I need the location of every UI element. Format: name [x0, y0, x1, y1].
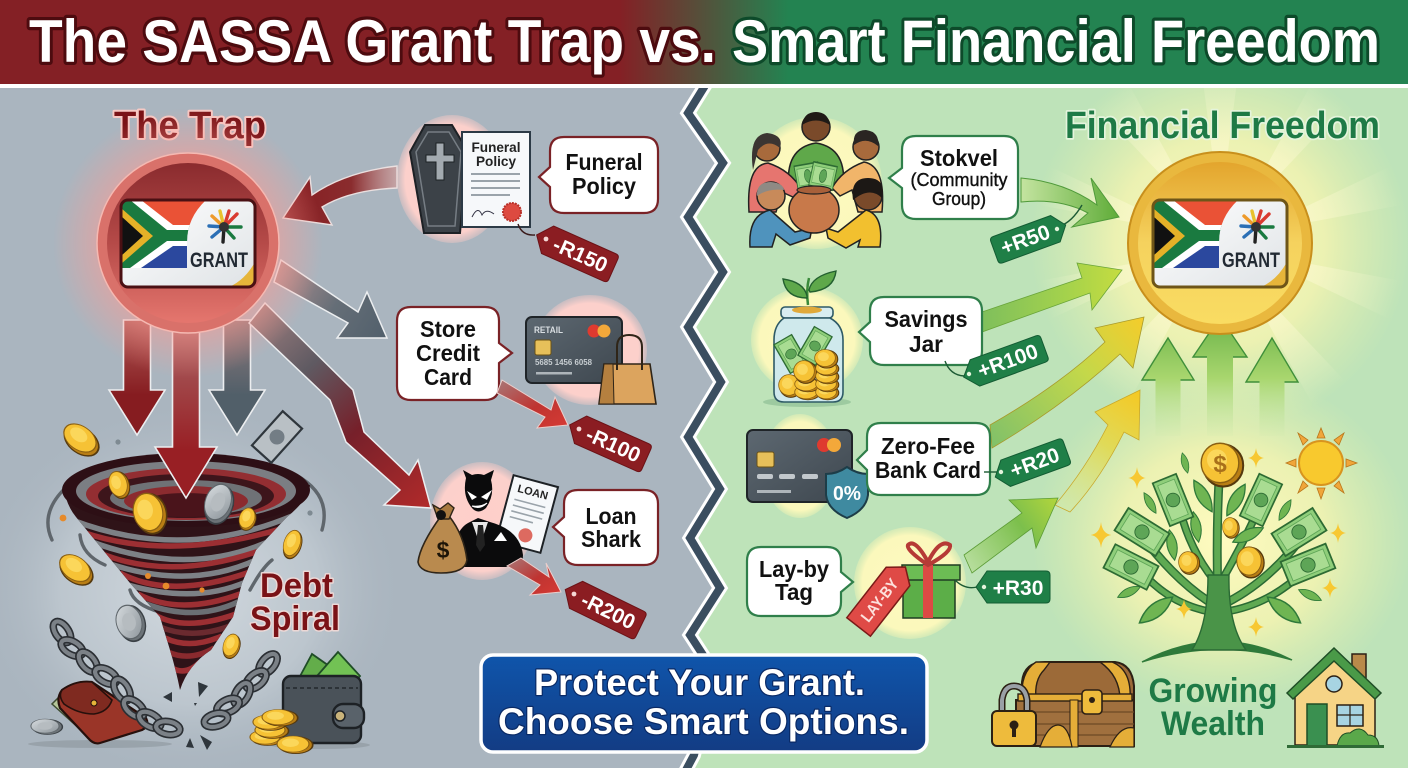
lay-by gift icon: LAY-BY [858, 576, 903, 626]
zigzag divider [685, 84, 723, 768]
label: Debt Spiral: Spiral [250, 600, 340, 638]
zero-fee bank card icon [747, 414, 868, 518]
panel: the trap background [0, 88, 723, 768]
falling coins and banknote [53, 411, 313, 661]
gold grant card circle [1128, 152, 1312, 334]
call to action box: Protect Your Grant. [534, 662, 865, 703]
price tag: -R200: -R200 [577, 589, 639, 634]
glow behind money tree [1032, 370, 1408, 710]
stokvel community group icon [749, 112, 883, 249]
title: The SASSA Grant Trap vs. [29, 8, 716, 75]
house [1287, 648, 1384, 748]
price tag: +R50 [990, 205, 1082, 264]
arrow: funeral policy to grant [283, 166, 397, 225]
bubble: store credit card: Credit [416, 340, 480, 366]
funeral policy group [397, 115, 530, 243]
glow around trap circle [53, 108, 323, 378]
label: Debt Spiral: Debt [260, 567, 333, 605]
title [29, 8, 1380, 75]
bubble: loan shark: Loan [586, 503, 636, 529]
bubble: funeral policy: Policy [572, 173, 636, 199]
arrow: lay-by to gold card (lower) [964, 498, 1058, 573]
price tag: +R20: +R20 [1007, 444, 1063, 483]
funeral policy group: Policy [476, 153, 516, 169]
label: Growing Wealth: Wealth [1161, 705, 1265, 743]
bubble: lay-by tag: Tag [775, 579, 813, 605]
arrow: lay-by to gold card (upper) [1055, 390, 1140, 512]
price tag: +R50: +R50 [998, 221, 1053, 260]
arrows from trap card to spiral [109, 320, 265, 498]
glow behind tornado [0, 400, 405, 768]
bubble: zero-fee bank card [857, 423, 990, 495]
funeral policy group: Funeral [472, 139, 520, 155]
store credit card group: 5685 1456 6058 [535, 358, 593, 367]
bubble: store credit card: Card [424, 364, 472, 390]
savings jar icon [751, 271, 863, 407]
arrow: grant to loan shark [249, 303, 431, 508]
price tag: +R30: +R30 [993, 577, 1043, 600]
arrow: grant to store credit [274, 260, 387, 338]
lay-by gift icon [847, 527, 966, 639]
price tag: -R100 [564, 411, 652, 473]
dark wallet with cash and coins [250, 652, 370, 754]
arrow: loan shark to -R200 [507, 558, 561, 595]
arrow: store credit to -R100 [497, 380, 568, 428]
loan shark group: $ [437, 537, 450, 563]
bubble: funeral policy [539, 137, 658, 213]
treasure chest and padlock [992, 662, 1134, 747]
label: Growing Wealth: Growing [1148, 672, 1278, 710]
zero-fee bank card icon: 0% [833, 483, 861, 505]
glow behind gold circle [1030, 53, 1408, 433]
bubble: funeral policy: Funeral [566, 149, 642, 175]
arrow: savings jar to gold card [982, 263, 1122, 332]
debt spiral tornado [48, 453, 324, 690]
bubble: stokvel [889, 136, 1018, 219]
broken chains and red wallet [28, 618, 281, 750]
money tree: $ [1213, 451, 1227, 478]
price tag: +R20 [984, 438, 1071, 490]
bubble: store credit card [397, 307, 512, 400]
sun [1286, 428, 1357, 499]
upward arrows into gold circle [1142, 317, 1298, 436]
call to action box: Choose Smart Options. [498, 701, 909, 742]
heading: The Trap: The Trap [114, 105, 266, 147]
label: Growing Wealth [1148, 672, 1278, 743]
bubble: loan shark [553, 490, 658, 565]
rays behind gold circle [1038, 58, 1402, 404]
bubble: zero-fee bank card: Zero-Fee [881, 433, 975, 459]
price tag: -R150: -R150 [549, 233, 611, 277]
bubble: zero-fee bank card: Bank Card [875, 457, 981, 483]
bubble: savings jar [859, 297, 982, 365]
store credit card group: RETAIL [534, 325, 563, 336]
bubble: store credit card: Store [420, 316, 476, 342]
bubble: stokvel: Group) [932, 189, 986, 209]
arrow: zero-fee card to gold card [990, 317, 1144, 448]
money tree [1091, 443, 1346, 662]
loan shark group [418, 462, 558, 580]
bubble: savings jar: Jar [909, 331, 943, 357]
trap grant card circle [97, 153, 279, 333]
text: GRANT: GRANT [1222, 249, 1280, 272]
bubble: stokvel: Stokvel [920, 145, 998, 171]
bubble: savings jar: Savings [884, 306, 968, 332]
price tag: -R150 [518, 221, 619, 283]
label: Debt Spiral [250, 567, 340, 638]
price tag: -R100: -R100 [582, 423, 644, 467]
bubble: stokvel: (Community [910, 170, 1008, 190]
header banner [0, 0, 1408, 84]
price tag: +R100 [945, 334, 1049, 390]
arrow: stokvel to gold card [1021, 178, 1119, 227]
bubble: lay-by tag: Lay-by [759, 556, 829, 582]
price tag: +R100: +R100 [975, 340, 1041, 383]
price tag: -R200 [559, 576, 647, 640]
text: GRANT: GRANT [190, 249, 248, 272]
price tag: +R30 [955, 571, 1050, 603]
bubble: lay-by tag [747, 547, 853, 616]
bubble: loan shark: Shark [581, 526, 641, 552]
loan shark group: LOAN [516, 483, 549, 503]
call to action box [481, 655, 927, 752]
heading: Financial Freedom: Financial Freedom [1065, 105, 1380, 147]
store credit card group [526, 295, 656, 405]
